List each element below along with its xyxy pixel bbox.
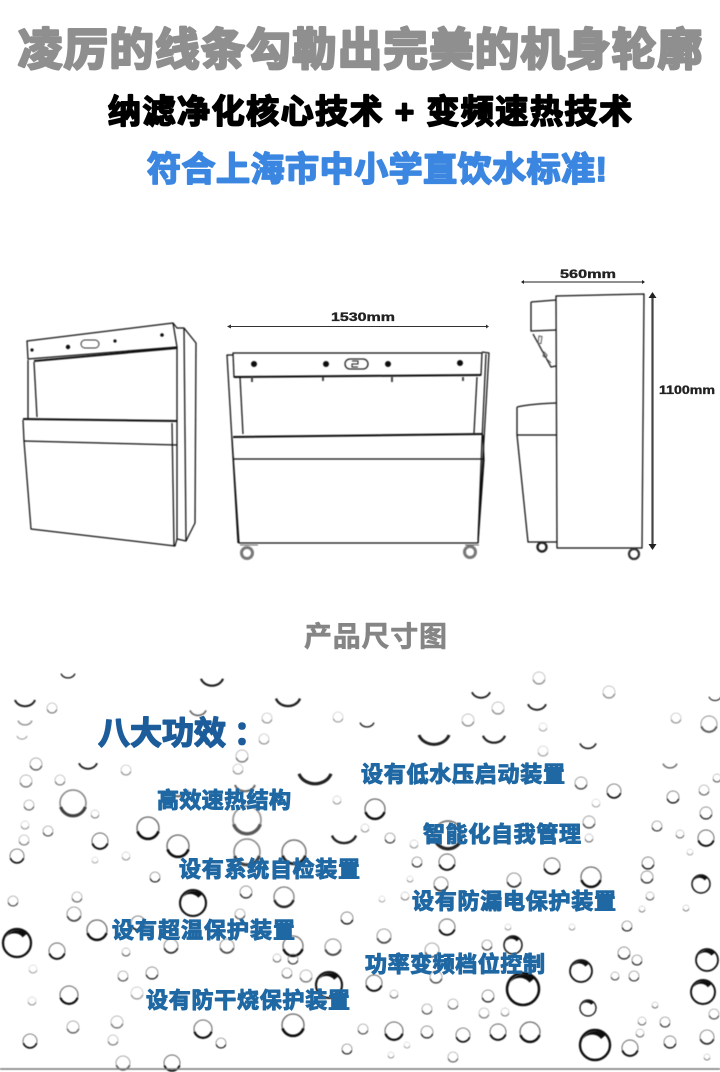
subtitle: core technologies: 纳滤净化核心技术 + 变频速热技术 bbox=[108, 93, 632, 130]
drawing: front view of machine bbox=[227, 352, 489, 558]
drawing: perspective view of machine bbox=[23, 323, 196, 546]
feature: dry-burn protection: 设有防干烧保护装置 bbox=[146, 988, 350, 1013]
heading: eight functions: 八大功效 bbox=[98, 715, 226, 751]
feature: over-temperature protection: 设有超温保护装置 bbox=[112, 918, 295, 943]
dimension: height 1100mm: 1100mm bbox=[659, 385, 715, 397]
feature: leakage protection: 设有防漏电保护装置 bbox=[412, 889, 616, 914]
feature: system self-check: 设有系统自检装置 bbox=[179, 857, 360, 882]
feature: intelligent self-management: 智能化自我管理 bbox=[423, 822, 581, 847]
title: main heading: 凌厉的线条勾勒出完美的机身轮廓 bbox=[18, 26, 702, 75]
dimension: depth 560mm: 560mm bbox=[560, 269, 616, 281]
dimension: depth 560mm bbox=[521, 269, 645, 284]
feature: variable frequency power control: 功率变频档位控制 bbox=[365, 952, 545, 977]
dimension: height 1100mm bbox=[648, 292, 715, 550]
dimension: width 1530mm: 1530mm bbox=[331, 312, 395, 324]
background: water droplets bbox=[0, 672, 720, 1071]
heading: eight functions: ： bbox=[234, 715, 266, 751]
drawing: side view of machine bbox=[517, 294, 644, 559]
subtitle: drinking water standard: 符合上海市中小学直饮水标准! bbox=[147, 151, 607, 189]
feature: low water pressure start: 设有低水压启动装置 bbox=[361, 762, 565, 787]
caption: product dimensions: 产品尺寸图 bbox=[304, 621, 447, 652]
dimension: width 1530mm bbox=[227, 312, 489, 328]
feature: efficient fast heating structure: 高效速热结构 bbox=[157, 788, 291, 813]
